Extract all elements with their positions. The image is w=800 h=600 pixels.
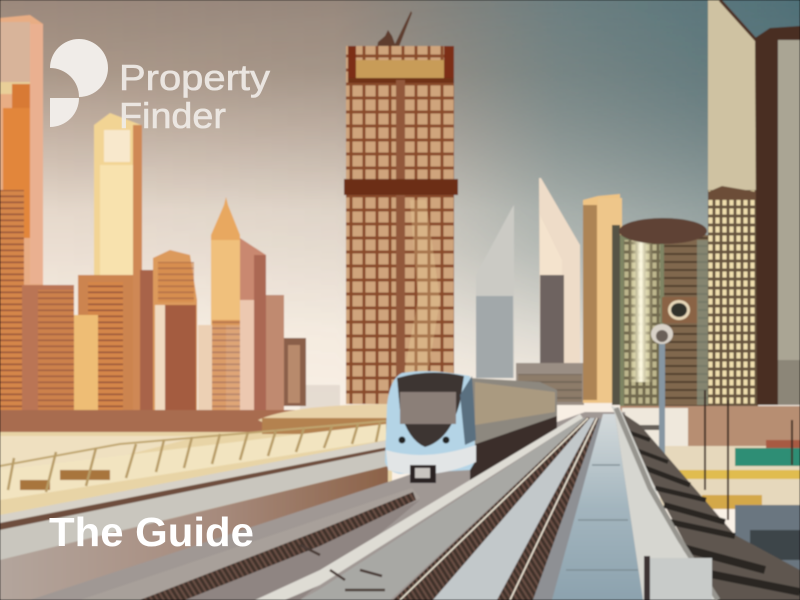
metro train	[385, 371, 557, 483]
parapet wall	[0, 440, 400, 600]
fence louvres	[612, 406, 800, 600]
logo wordmark: Property	[119, 57, 270, 98]
central tower with crane	[344, 11, 458, 404]
far left skyline	[0, 15, 340, 440]
right skyline	[583, 0, 800, 600]
logo wordmark: Finder	[119, 95, 226, 136]
track bed and rails	[30, 412, 645, 600]
poles	[705, 390, 792, 520]
logo wordmark	[119, 57, 270, 136]
overpass and railing	[0, 404, 392, 522]
walkway	[552, 414, 643, 600]
title: The Guide	[49, 509, 254, 555]
white twin towers	[476, 178, 584, 405]
logo mark	[50, 39, 108, 127]
street lamp	[651, 324, 673, 468]
curb and handrail	[611, 406, 718, 600]
